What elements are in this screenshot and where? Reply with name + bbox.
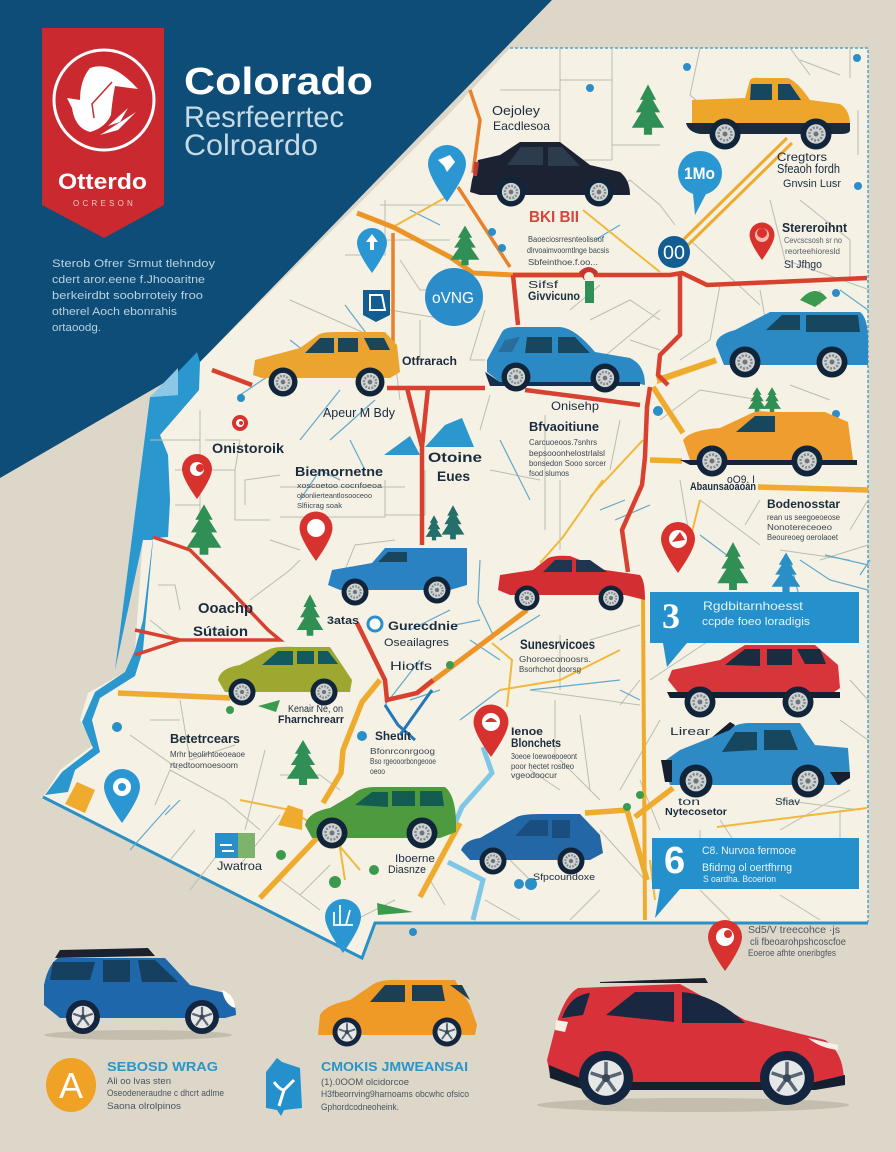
map labels: Cevcscsosh sr no: [784, 236, 842, 245]
map labels: [170, 103, 848, 882]
map labels: Gurecdnie: [388, 619, 458, 633]
blue circle: oVNG: [432, 290, 474, 307]
orange patch south: [278, 805, 303, 830]
map labels: fsod slumos: [529, 469, 569, 478]
orange patch west: [65, 782, 95, 813]
pin red 5: [708, 920, 742, 971]
red roads: [212, 273, 867, 700]
small dots: [112, 54, 862, 936]
blue bubble 3: ccpde foeo loradigis: [702, 616, 811, 628]
map labels: bepsooonhelostrlalsl: [529, 449, 605, 458]
pin blue 2: [357, 228, 387, 273]
map labels: Abaunsaoaoan: [690, 481, 756, 493]
car: large red SUV: [547, 978, 845, 1105]
title: Colorado: [184, 61, 373, 103]
car: blue SUV south-east: [661, 722, 850, 798]
pin red 1: [182, 454, 212, 499]
map labels: Sútaion: [193, 623, 248, 639]
county lines: [130, 48, 870, 920]
map labels: Sfiav: [775, 797, 800, 808]
map labels: Sbfeinthoe.f.oo...: [528, 258, 598, 267]
map labels: oeoo: [370, 767, 385, 776]
map labels: bonsedon Sooo sorcer: [529, 459, 606, 468]
map labels: Oejoley: [492, 103, 541, 118]
map labels: Sunesrvicoes: [520, 636, 595, 652]
west red roads: [135, 537, 280, 655]
tree 2: [451, 226, 479, 265]
map labels: rean us seegoeoeose: [767, 513, 841, 522]
navy square marker: [363, 290, 390, 322]
red marker by road: [579, 267, 598, 303]
title: [184, 61, 373, 162]
map labels: obonlierteantlosooceoo: [297, 491, 372, 500]
map labels: Givvicuno: [528, 289, 580, 303]
legend text: shield: CMOKIS JMWEANSAI: [321, 1059, 468, 1074]
blue bubble 6: [652, 838, 859, 918]
intro paragraph: otherel Aoch ebonrahis: [52, 306, 178, 318]
intro paragraph: ortaoodg.: [52, 322, 101, 334]
map labels: Eacdlesoa: [493, 119, 550, 133]
map labels: Beoureoeg oerolaoet: [767, 533, 839, 542]
map labels: Sifsf: [528, 280, 558, 291]
car: large orange hatch: [318, 980, 477, 1046]
rivers and creeks: [130, 210, 870, 850]
thin orange roads: [393, 90, 510, 345]
blue bubble 3: Rgdbitarnhoesst: [703, 599, 804, 613]
map labels: Otfrarach: [402, 354, 457, 368]
map labels: Slfiicrag soak: [297, 501, 342, 510]
map labels: Bso rgeooorbongeooe: [370, 757, 436, 766]
badge: OCRESON: [73, 199, 135, 208]
tree 6: [717, 542, 749, 590]
map labels: Sheuit: [375, 729, 411, 743]
map land: [43, 48, 868, 958]
map labels: Bsorhchot doorsg: [519, 665, 581, 674]
map labels: ton: [678, 797, 700, 808]
map labels: Blonchets: [511, 736, 561, 750]
pin blue 3: [104, 769, 140, 823]
map labels: Sfpcoundoxe: [533, 872, 595, 882]
tall yellow road: [643, 597, 645, 920]
map labels: reorteehioresld: [785, 247, 840, 256]
blue circle: [425, 268, 483, 326]
small red marker: [232, 415, 248, 431]
car: blue SUV east: [716, 312, 868, 378]
map labels: vgeodoocur: [511, 771, 557, 780]
map labels: Hiotfs: [390, 659, 432, 673]
title: Colroardo: [184, 129, 318, 162]
map labels: Ienoe: [511, 726, 543, 738]
legend text: A: Oseodeneraudne c dhcrt adlme: [107, 1088, 224, 1098]
car: orange truck: [680, 411, 857, 476]
blue bubble 6: Bfidrng ol oertfhrng: [702, 862, 792, 874]
title: Resrfeerrtec: [184, 101, 344, 134]
map labels: Iboerne: [395, 853, 435, 865]
blue bubble 6: 6: [664, 840, 685, 882]
map labels: Oseailagres: [384, 637, 450, 649]
map labels: oO9. I: [727, 474, 755, 486]
map labels: Bodenosstar: [767, 497, 840, 511]
map labels: Lirear: [670, 726, 710, 738]
map labels: xoscoetoo cocnfoeoa: [297, 481, 383, 490]
map labels: Carcuoeoos.7snhrs: [529, 438, 597, 447]
map labels: Eues: [437, 468, 470, 484]
green park shapes: [226, 291, 827, 915]
blue bubble 6: S oardha. Bcoerion: [703, 874, 776, 884]
map labels: Kenair Ne, on: [288, 704, 343, 715]
intro paragraph: cdert aror.eene f.Jhooaritne: [52, 274, 205, 286]
orange roads: [357, 213, 583, 693]
map labels: Betetrcears: [170, 731, 240, 746]
map labels: Onistoroik: [212, 440, 284, 456]
blue bubble 3: 3: [662, 596, 680, 636]
bottom right pin text: [748, 925, 846, 958]
car: red sedan: [498, 556, 645, 610]
double highway: [683, 138, 792, 245]
car: orange pickup: [686, 78, 850, 150]
legend icon: A: [46, 1058, 96, 1112]
tree 1: [632, 84, 664, 135]
map labels: Apeur M Bdy: [323, 405, 395, 420]
navy circle: [658, 236, 690, 268]
wide river: [448, 747, 492, 920]
car: red SUV east: [667, 645, 840, 718]
mountains: [384, 418, 474, 455]
yellow roads: [118, 360, 868, 898]
navy circle: 00: [663, 243, 685, 264]
car: olive hatch: [218, 647, 352, 706]
car: navy SUV: [461, 814, 603, 874]
blue bubble 6: C8. Nurvoa fermooe: [702, 845, 796, 857]
teal trees: [426, 505, 464, 540]
map labels: Nytecosetor: [665, 807, 727, 818]
map labels: Bfvaoitiune: [529, 419, 599, 434]
bottom right pin text: Sd5/V treecohce ·js: [748, 925, 840, 936]
map labels: Cregtors: [777, 150, 827, 164]
badge: Otterdo: [58, 169, 147, 194]
legend text: A: Ali oo lvas sten: [107, 1076, 171, 1086]
map labels: Sfeaoh fordh: [777, 161, 840, 176]
map labels: 3atas: [327, 615, 359, 627]
car: large blue SUV: [44, 948, 236, 1034]
intro paragraph: berkeirdbt soobrroteiy froo: [52, 290, 203, 302]
legend text: A: [107, 1059, 224, 1111]
map labels: Ooachp: [198, 600, 253, 617]
pin red 2: [300, 512, 332, 561]
pin blue 4: [325, 899, 361, 953]
legend icon: A: A: [59, 1065, 83, 1106]
navy header panel: [0, 0, 552, 478]
thin yellow roads: [240, 195, 867, 900]
tree 4: [297, 594, 323, 636]
tree 7 blue: [772, 553, 800, 592]
map labels: Biemornetne: [295, 464, 383, 479]
map labels: Nonotereceoeo: [767, 523, 833, 532]
intro paragraph: [52, 258, 216, 334]
map coast and border: [43, 48, 868, 958]
map labels: Otoine: [428, 449, 482, 465]
map labels: poor hectet rostleo: [511, 762, 575, 771]
car shadows: [44, 1030, 849, 1112]
bottom right pin text: cli fbeoarohpshcoscfoe: [750, 937, 846, 948]
intro paragraph: Sterob Ofrer Srmut tlehndoy: [52, 258, 216, 270]
legend text: shield: (1).0OOM olcidorcoe: [321, 1077, 409, 1087]
map labels: Stereroihnt: [782, 220, 848, 235]
badge: [42, 28, 164, 238]
map labels: Diasnze: [388, 864, 426, 876]
car: blue SUV north: [485, 327, 645, 392]
legend text: shield: H3fbeorrving9harnoams obcwhc ofsico: [321, 1089, 469, 1099]
legend text: A: SEBOSD WRAG: [107, 1059, 218, 1074]
blue route loop: [385, 690, 432, 740]
map labels: Gnvsin Lusr: [783, 178, 841, 190]
car: black sedan: [470, 142, 630, 206]
legend icon: shield: [266, 1058, 302, 1116]
map labels: Bfonrconrgoog: [370, 747, 435, 756]
pin red 3: [661, 522, 695, 573]
map labels: 3oeoe Ioewoeooeont: [511, 752, 578, 761]
map labels: Mrhr beolirhtoeoeaoe: [170, 750, 246, 759]
map labels: rtredtoomoesoom: [170, 761, 238, 770]
car: yellow SUV: [253, 332, 400, 396]
tree 5: [287, 740, 319, 785]
car: blue pickup: [328, 548, 467, 606]
map icons: [215, 833, 255, 858]
map labels: Sl Jfhgo: [784, 259, 822, 271]
legend text: shield: [321, 1059, 469, 1112]
legend text: A: Saona olrolpinos: [107, 1101, 182, 1111]
map labels: Baoeciosrresnteolisoof: [528, 235, 605, 244]
pin red 4: [474, 704, 508, 757]
bubble 1: 1Mo: [684, 164, 715, 183]
pin blue 1: [428, 145, 466, 202]
legend text: shield: Gphordcodneoheink.: [321, 1102, 399, 1112]
map labels: BKI BII: [529, 209, 579, 226]
pin red 6: [750, 222, 774, 260]
bubble 1: [678, 151, 722, 215]
trees behind truck: [748, 387, 781, 412]
map labels: Ghoroeconoosrs.: [519, 655, 591, 664]
tree 3: [187, 504, 221, 555]
map labels: Onisehp: [551, 399, 599, 413]
map labels: dlrvoaimvoorntlnge bacsis: [527, 246, 609, 255]
map labels: Jwatroa: [217, 859, 262, 873]
car: green SUV: [305, 787, 456, 848]
blue bubble 3: [650, 592, 859, 667]
map labels: Fharnchrearr: [278, 714, 345, 726]
bottom right pin text: Eoeroe afhte oneribgfes: [748, 948, 836, 958]
